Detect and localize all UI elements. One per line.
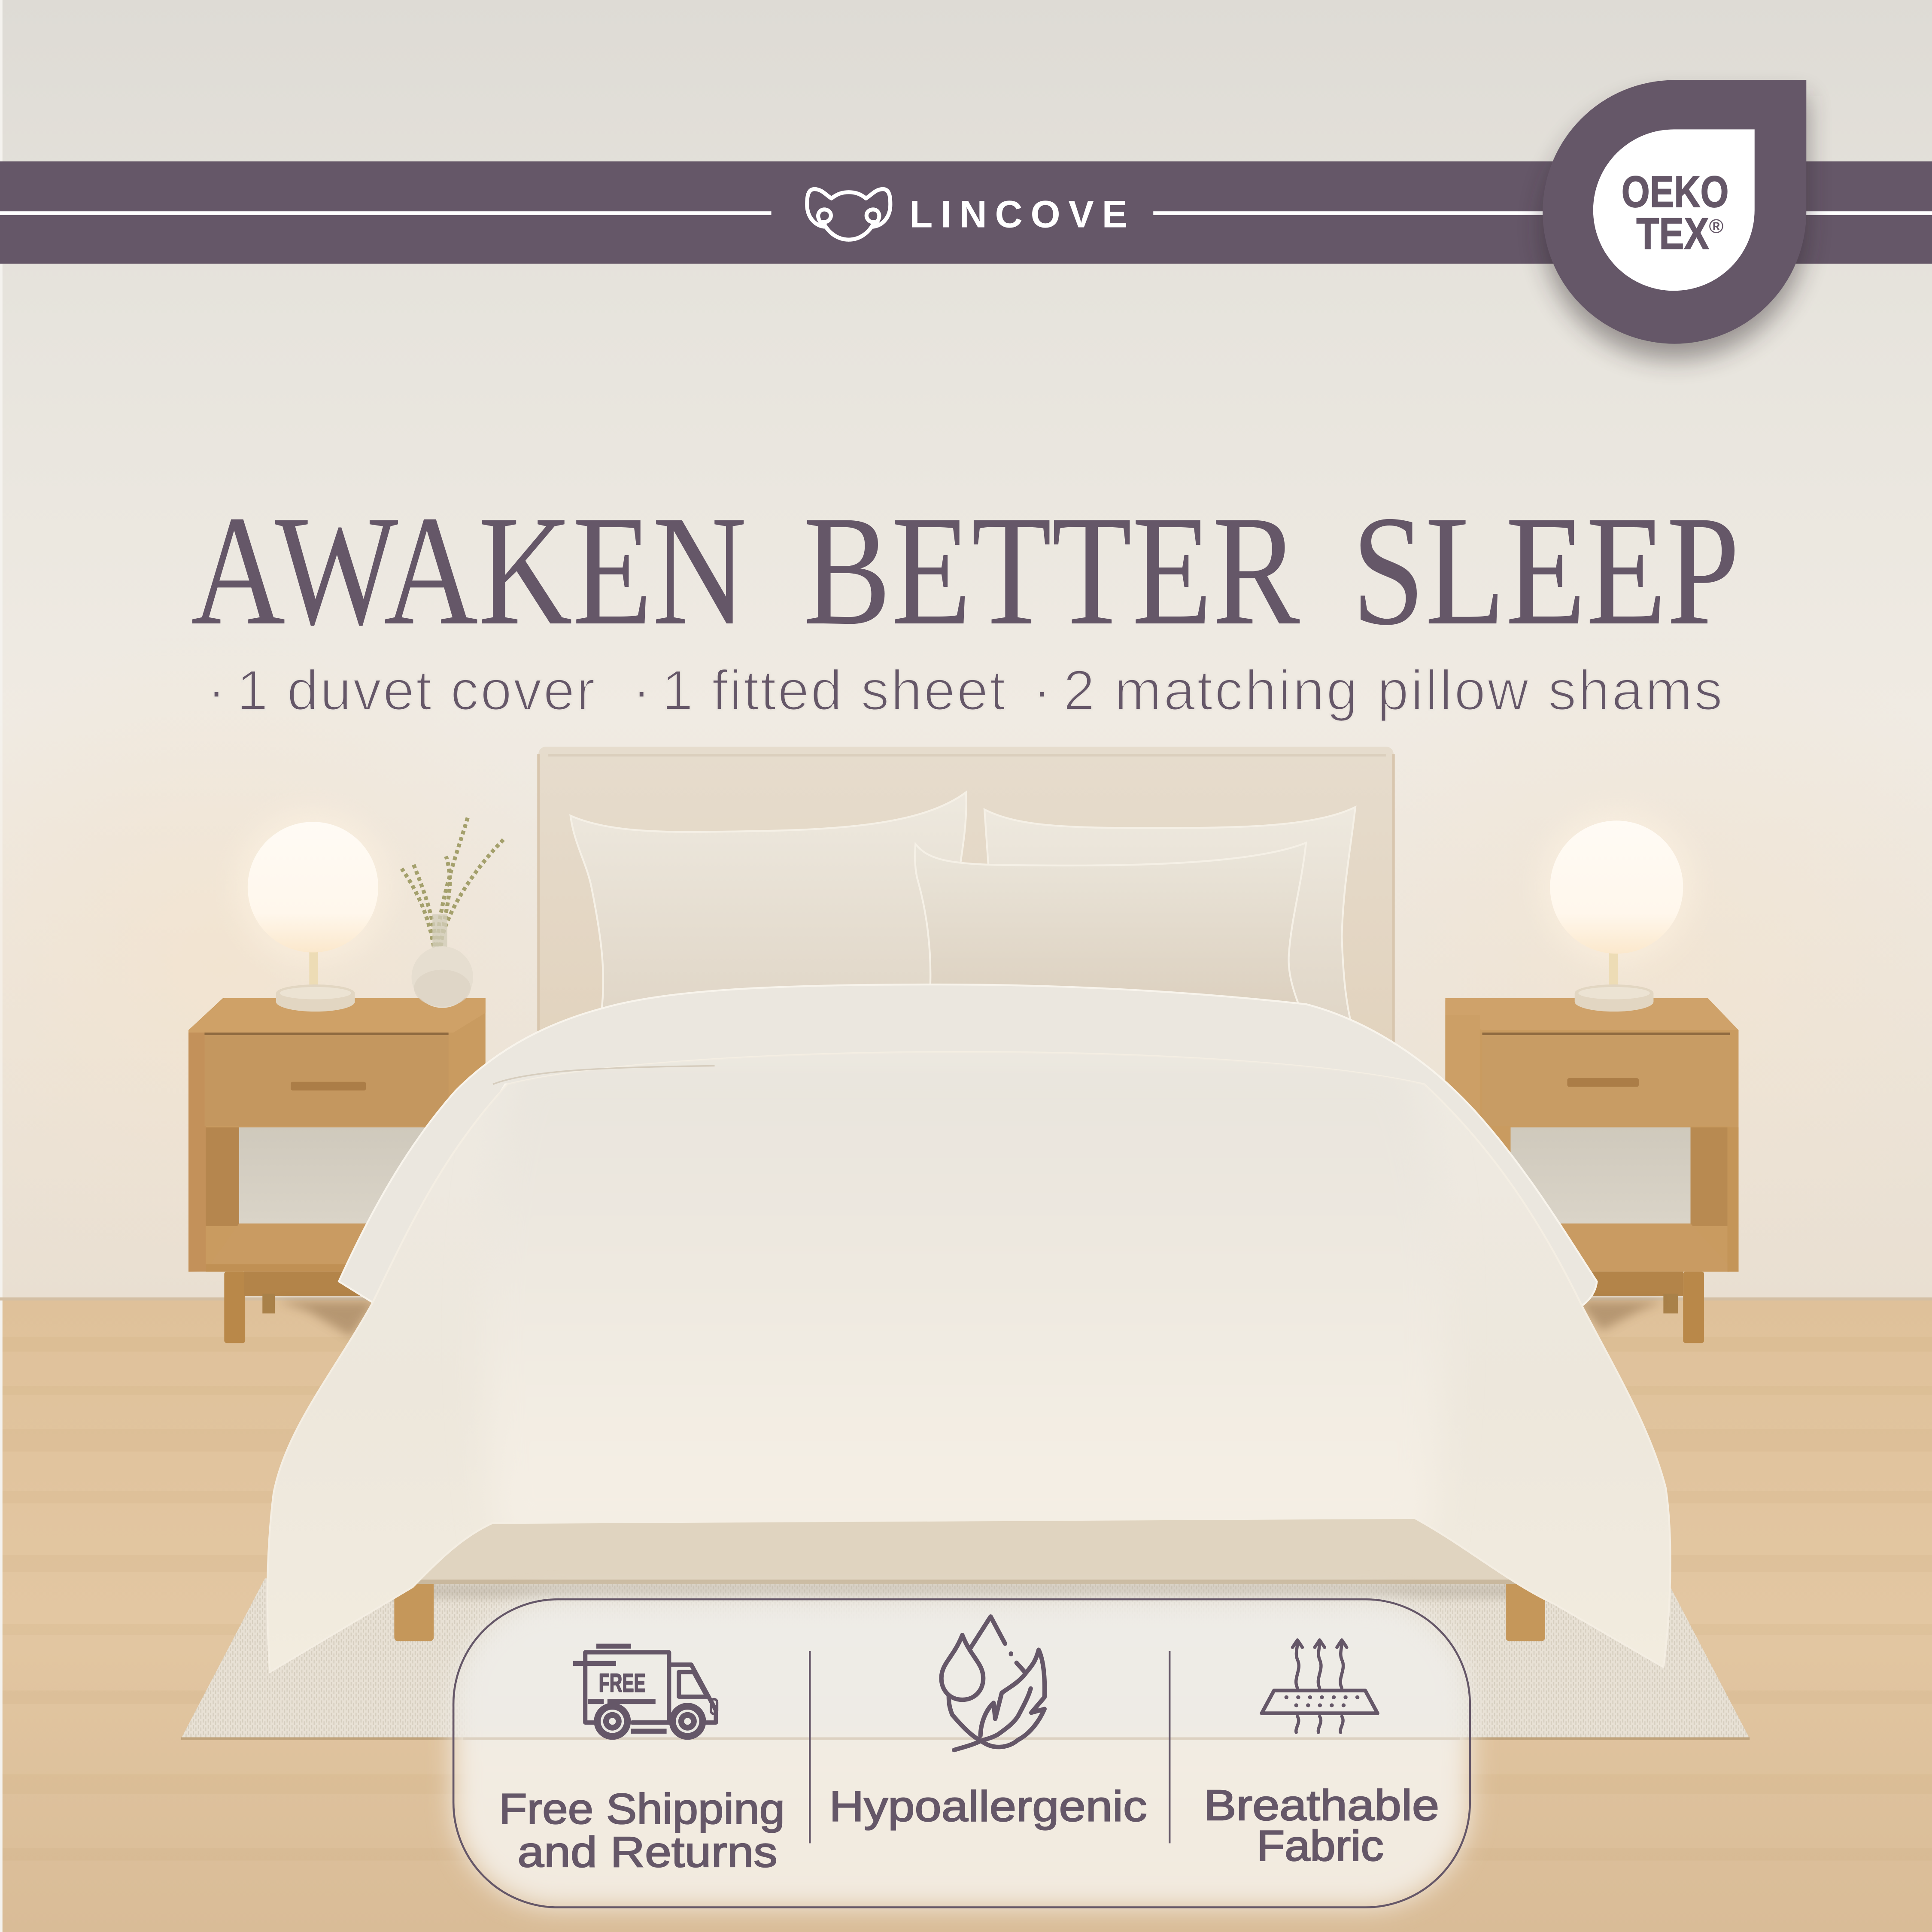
subtitle: · <box>1033 658 1051 722</box>
icon: breathable fabric <box>1262 1640 1378 1732</box>
duvet body <box>267 1052 1670 1672</box>
floor <box>0 1300 1932 1932</box>
label: breathable fabric <box>1204 1781 1439 1870</box>
label: free shipping <box>499 1785 785 1876</box>
left edge strip <box>0 0 3 1932</box>
wordmark: LINCOVE <box>909 192 1127 235</box>
divider right <box>1169 1651 1170 1843</box>
duvet top panel <box>537 1075 1383 1079</box>
badge body <box>1543 80 1806 344</box>
title: BETTER <box>803 483 1300 658</box>
rug edge in panel <box>463 1738 1460 1740</box>
bed base and legs <box>394 1510 1545 1641</box>
subtitle: 1 fitted sheet <box>662 658 1005 722</box>
icon: water drop and leaf <box>942 1616 1045 1750</box>
badge text <box>1622 167 1728 258</box>
panel outline <box>453 1599 1470 1908</box>
title <box>191 483 1740 658</box>
panel glow <box>453 1599 1470 1908</box>
title: AWAKEN <box>191 483 747 658</box>
pillows <box>571 792 1355 1020</box>
subtitle: · <box>632 658 651 722</box>
badge text: TEX <box>1636 209 1709 258</box>
wheels <box>594 1703 706 1740</box>
badge text: ® <box>1709 215 1724 237</box>
pillow: front <box>915 843 1306 1008</box>
label: free shipping: and Returns <box>517 1828 778 1876</box>
pillow: back left <box>571 792 966 1013</box>
wall background <box>0 0 1932 1301</box>
duvet upper fold <box>339 984 1597 1309</box>
pillow: back right <box>984 807 1355 1020</box>
title: SLEEP <box>1352 483 1740 658</box>
label: free shipping: Free Shipping <box>499 1785 785 1833</box>
headboard <box>538 747 1394 1042</box>
subtitle: 1 duvet cover <box>237 658 595 722</box>
duvet <box>267 984 1670 1672</box>
vase with dried plant <box>402 816 505 1008</box>
badge inner <box>1593 129 1755 291</box>
skirting shadow <box>0 1297 1932 1300</box>
lamp: left <box>234 808 392 1012</box>
subtitle <box>207 658 1722 722</box>
subtitle: · <box>207 658 226 722</box>
duvet fold line <box>493 1066 715 1084</box>
floor planks <box>0 1337 1932 1861</box>
badge shadow <box>1543 96 1806 359</box>
label: hypoallergenic: Hypoallergenic <box>829 1783 1147 1831</box>
label: breathable fabric: Fabric <box>1257 1822 1384 1870</box>
icon: animal head <box>807 189 890 240</box>
label: breathable fabric: Breathable <box>1204 1781 1439 1829</box>
divider left <box>809 1651 811 1843</box>
floor shadows beside bed <box>277 1301 1663 1337</box>
icon: delivery truck <box>573 1646 717 1740</box>
badge text: OEKO <box>1622 167 1728 216</box>
badge: oeko-tex <box>1543 80 1806 359</box>
icon: delivery truck: FREE <box>599 1668 646 1697</box>
logo: lincove <box>807 189 1127 240</box>
lamp: right <box>1538 808 1695 1012</box>
rug <box>181 1578 1750 1740</box>
nightstand: right <box>1445 998 1738 1343</box>
brand band <box>0 161 1932 264</box>
nightstand: left <box>188 998 486 1343</box>
subtitle: 2 matching pillow shams <box>1063 658 1722 722</box>
lamp glow on wall <box>0 629 1932 1294</box>
panel: features <box>453 1599 1470 1908</box>
